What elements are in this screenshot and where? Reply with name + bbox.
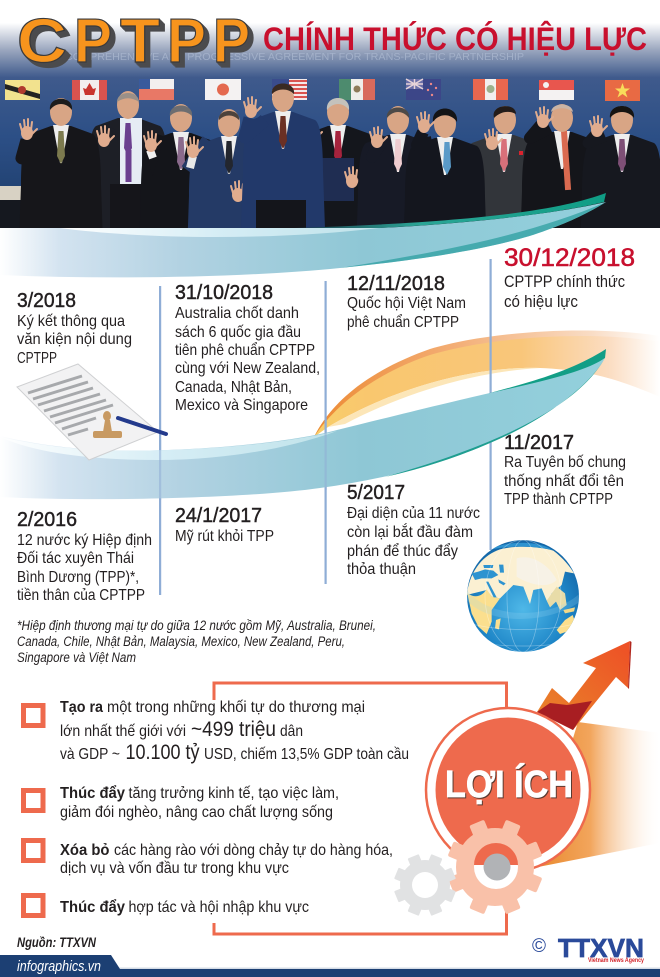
logo tagline: Vietnam News Agency xyxy=(588,958,645,964)
gear hole xyxy=(474,845,518,889)
benefit 2 text: tăng trưởng kinh tế, tạo việc làm, xyxy=(128,785,339,802)
event: 5/2017 xyxy=(347,482,480,578)
event: 31/10/2018 xyxy=(175,282,320,414)
minister 5 xyxy=(241,84,325,229)
event: 30/12/2018 xyxy=(504,244,635,311)
backdrop caption: COMPREHENSIVE AND PROGRESSIVE AGREEMENT FOR TRANS-PACIFIC PARTNERSHIP xyxy=(65,52,524,63)
benefit 4 text xyxy=(60,898,309,916)
event: 5/2017: còn lại bắt đầu đàm xyxy=(347,522,473,541)
ribbon dark tip xyxy=(295,193,606,228)
signed folder xyxy=(322,158,354,201)
arrow body xyxy=(537,641,630,730)
benefit 1 text: Tạo ra xyxy=(60,699,103,716)
title: CPTPP letters: P xyxy=(213,7,250,76)
footer bar xyxy=(0,955,660,977)
globe land xyxy=(467,543,580,634)
flag: Japan xyxy=(205,79,241,100)
ribbon pale crescent xyxy=(60,228,379,237)
event: 2/2016: Bình Dương (TPP)*, xyxy=(17,569,139,586)
benefit 1 text: và GDP ~ xyxy=(60,746,120,763)
minister 11 xyxy=(586,106,660,202)
flag: Mexico xyxy=(339,79,375,100)
event: 30/12/2018: có hiệu lực xyxy=(504,293,578,311)
event: 2/2016: 12 nước ký Hiệp định xyxy=(17,532,152,549)
benefit 1 text: ~499 triệu xyxy=(191,718,276,741)
orange ribbon upper edge xyxy=(314,330,660,437)
circle fill xyxy=(436,718,580,862)
timeline line overlays xyxy=(159,420,327,500)
minister 8 xyxy=(405,108,486,222)
minister 4 xyxy=(182,109,244,228)
flag: New Zealand xyxy=(406,79,441,100)
footnote: Canada, Chile, Nhật Bản, Malaysia, Mexico, New Zealand, Peru, xyxy=(17,634,345,649)
footnote: Singapore và Việt Nam xyxy=(17,650,136,665)
pen xyxy=(118,418,166,434)
benefit 2 text: Thúc đẩy xyxy=(60,784,125,802)
minister 7 xyxy=(357,106,414,226)
benefit 1 xyxy=(24,699,409,764)
heading: lợi ích: LỢI ÍCH xyxy=(445,762,573,806)
benefit 3 xyxy=(24,840,393,877)
ribbon teal sliver xyxy=(470,349,606,400)
icon: signed document with stamp and pen xyxy=(17,364,166,460)
event: 5/2017: 5/2017 xyxy=(347,482,405,504)
orange ribbon band xyxy=(314,331,660,437)
event: 31/10/2018: 31/10/2018 xyxy=(175,282,273,304)
title: CPTPP letters: P xyxy=(167,7,206,76)
benefit 3 text xyxy=(60,842,393,877)
event: 5/2017: thỏa thuận xyxy=(347,561,416,578)
footer tab xyxy=(0,955,120,977)
globe ocean xyxy=(467,540,579,652)
timeline vertical lines xyxy=(159,259,492,595)
benefit 1 text: lớn nhất thế giới với xyxy=(60,723,186,740)
event: 31/10/2018: Australia chốt danh xyxy=(175,305,299,322)
benefit 1 text: một trong những khối tự do thương mại xyxy=(107,699,365,716)
bullet square xyxy=(24,896,43,916)
minister 1 xyxy=(19,98,103,243)
arrow dark fold xyxy=(537,701,592,730)
event: 31/10/2018: cùng với New Zealand, xyxy=(175,360,320,377)
event: 12/11/2018 xyxy=(347,273,466,331)
flag: Malaysia xyxy=(272,79,307,100)
header photo: ministers on stage xyxy=(0,25,660,228)
icon: large gear xyxy=(448,820,542,914)
event: 11/2017: Ra Tuyên bố chung xyxy=(504,454,626,471)
event: 11/2017: 11/2017 xyxy=(504,432,574,454)
icon: globe xyxy=(467,540,580,652)
benefit 4 text: Thúc đẩy xyxy=(60,898,125,916)
middle ribbon xyxy=(0,349,606,499)
flags row xyxy=(5,79,640,101)
flag: Chile xyxy=(139,79,174,100)
benefit 2 text xyxy=(60,784,339,821)
ribbon lower edge xyxy=(385,358,605,477)
top ribbon xyxy=(0,193,606,277)
benefit 4 text: hợp tác và hội nhập khu vực xyxy=(128,899,309,916)
document sheet xyxy=(17,364,158,460)
event: 3/2018: Ký kết thông qua xyxy=(17,313,125,330)
footer strip xyxy=(0,969,660,977)
event: 31/10/2018: Mexico và Singapore xyxy=(175,397,308,414)
title: CPTPP letters: P xyxy=(74,7,112,76)
orange beam behind benefits circle xyxy=(533,722,660,868)
event: 3/2018: văn kiện nội dung xyxy=(17,331,132,348)
orange ribbon pale lower edge xyxy=(328,368,540,427)
benefit 1 text: USD, chiếm 13,5% GDP toàn cầu xyxy=(204,746,409,763)
minister 2 xyxy=(92,91,165,200)
benefit 2 xyxy=(24,784,339,821)
benefit 2 text: giảm đói nghèo, nâng cao chất lượng sống xyxy=(60,804,333,821)
event: 2/2016 xyxy=(17,509,152,604)
benefit 1 text xyxy=(60,699,409,764)
benefit 4 xyxy=(24,896,309,916)
bullet square xyxy=(24,840,43,860)
benefit 1 text: dân xyxy=(280,723,303,740)
event: 12/11/2018: phê chuẩn CPTPP xyxy=(347,313,459,331)
gear hub xyxy=(484,854,510,880)
ribbon pale crescent xyxy=(0,431,337,460)
stage table xyxy=(0,200,20,228)
benefit 1 text: 10.100 tỷ xyxy=(126,741,200,764)
bullet square xyxy=(24,706,43,726)
footnote xyxy=(17,618,376,665)
ribbon body xyxy=(0,202,606,277)
title: CPTPP letters: T xyxy=(120,7,160,76)
ribbon lower edge xyxy=(340,202,606,268)
logo wordmark: TTXVN xyxy=(558,933,644,963)
title: CPTPP letters: C xyxy=(17,7,67,76)
event: 30/12/2018: CPTPP chính thức xyxy=(504,273,625,291)
flag: Vietnam xyxy=(605,80,640,101)
event: 11/2017: TPP thành CPTPP xyxy=(504,491,613,508)
event: 31/10/2018: Canada, Nhật Bản, xyxy=(175,379,292,396)
event: 24/1/2017: Mỹ rút khỏi TPP xyxy=(175,528,274,545)
event: 3/2018 xyxy=(17,290,132,367)
benefits circle xyxy=(426,708,590,872)
event: 30/12/2018: 30/12/2018 xyxy=(504,244,635,272)
bullet square xyxy=(24,790,43,810)
photo backdrop xyxy=(0,25,660,186)
event: 31/10/2018: sách 6 quốc gia đầu xyxy=(175,324,301,341)
benefit 3 text: Xóa bỏ xyxy=(60,842,110,859)
gear teeth xyxy=(448,820,542,914)
minister 3 xyxy=(141,104,210,228)
benefit 3 text: dịch vụ và vốn đầu tư trong khu vực xyxy=(60,860,289,877)
flag: Canada xyxy=(72,80,107,100)
event: 11/2017: thống nhất đổi tên xyxy=(504,472,624,490)
globe grid xyxy=(474,540,571,652)
flag: Singapore xyxy=(539,80,574,100)
ribbon body xyxy=(0,358,605,499)
footer site name: infographics.vn xyxy=(17,958,101,975)
event: 12/11/2018: Quốc hội Việt Nam xyxy=(347,295,466,312)
flag: Brunei xyxy=(5,80,40,100)
circle outer ring xyxy=(426,708,590,872)
footer light line xyxy=(0,968,660,969)
event: 12/11/2018: 12/11/2018 xyxy=(347,273,445,295)
event: 2/2016: tiền thân của CPTPP xyxy=(17,587,145,604)
event: 3/2018: CPTPP xyxy=(17,350,57,367)
event: 24/1/2017 xyxy=(175,505,274,545)
footnote: *Hiệp định thương mại tự do giữa 12 nước gồm Mỹ, Australia, Brunei, xyxy=(17,618,376,633)
event: 11/2017 xyxy=(504,432,626,508)
event: 24/1/2017: 24/1/2017 xyxy=(175,505,262,527)
icon: growth arrow xyxy=(537,641,632,730)
copyright mark: © xyxy=(532,936,546,957)
event: 31/10/2018: tiên phê chuẩn CPTPP xyxy=(175,341,315,359)
document text lines xyxy=(28,376,113,435)
event: 2/2016: Đối tác xuyên Thái xyxy=(17,550,134,567)
flag: Peru xyxy=(473,79,508,100)
event: 2/2016: 2/2016 xyxy=(17,509,77,531)
benefit 3 text: các hàng rào với dòng chảy tự do hàng hóa, xyxy=(114,842,393,859)
desk papers and name plates xyxy=(0,186,21,200)
event: 5/2017: phán để thúc đẩy xyxy=(347,542,458,560)
minister 9 xyxy=(471,106,528,220)
event: 3/2018: 3/2018 xyxy=(17,290,76,312)
orange ribbon xyxy=(314,330,660,437)
arrow head edge xyxy=(628,641,632,689)
TTXVN logo xyxy=(532,933,645,964)
minister 6 xyxy=(320,98,372,201)
source: Nguồn: TTXVN xyxy=(17,934,97,950)
minister 10 xyxy=(521,104,586,216)
title: CPTPP letters xyxy=(17,7,250,76)
icon: small grey gear xyxy=(394,854,456,916)
stamp xyxy=(93,411,122,438)
benefits frame xyxy=(214,683,506,934)
event: 5/2017: Đại diện của 11 nước xyxy=(347,505,480,522)
